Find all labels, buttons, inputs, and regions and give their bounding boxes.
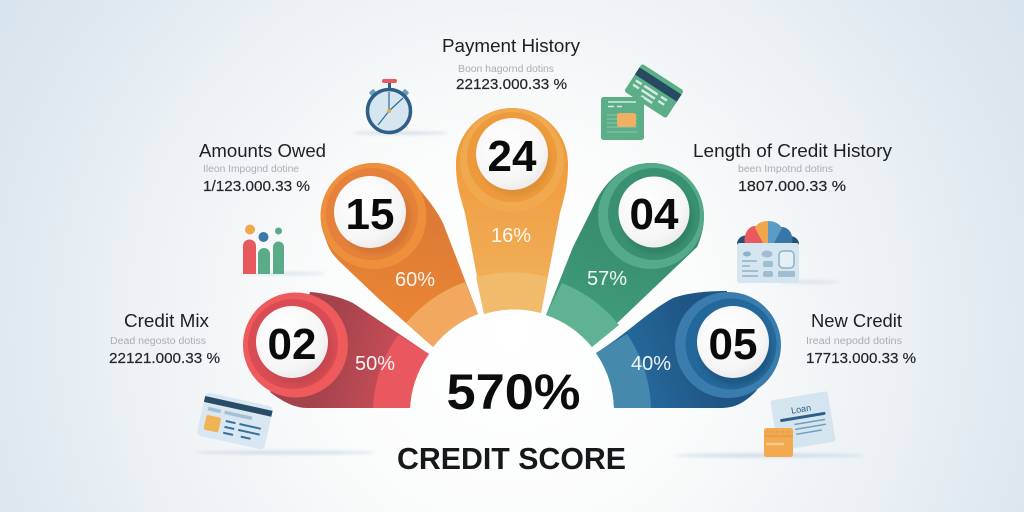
icon: fan chart card	[737, 221, 840, 284]
center score: 570%: 570%	[446, 364, 580, 420]
label: credit mix: Credit Mix	[124, 311, 209, 331]
panel: credit mix petal	[243, 292, 429, 408]
ring: payment history	[460, 108, 564, 212]
label: payment history: Boon hagornd dotins	[458, 64, 554, 75]
label: amounts owed: Ileon Impognd dotine	[203, 164, 299, 175]
number: 05: 05	[709, 320, 757, 369]
icon: stopwatch	[352, 79, 448, 134]
petal band: credit mix	[373, 335, 429, 408]
badge: 04	[618, 176, 690, 248]
panel: payment history petal	[456, 108, 568, 314]
label: amounts owed: Amounts Owed	[199, 141, 326, 161]
number: 04: 04	[630, 190, 679, 239]
badge: 15	[334, 176, 406, 248]
badge: 24	[476, 118, 548, 190]
label: length of credit history: Length of Credit History	[693, 141, 892, 161]
petal band: new credit	[596, 334, 651, 408]
label: new credit	[806, 311, 916, 367]
icon: loan document	[675, 391, 865, 458]
ring: new credit	[675, 292, 781, 398]
icon: green credit card and receipt	[601, 64, 684, 140]
label: payment history: 22123.000.33 %	[456, 76, 567, 93]
label: payment history: Payment History	[442, 36, 580, 56]
label: length of credit history	[693, 141, 892, 195]
percent: 50%: 50%	[355, 353, 395, 375]
label: payment history	[442, 36, 580, 93]
label: new credit: Iread nepodd dotins	[806, 336, 902, 347]
percent: 40%: 40%	[631, 353, 671, 375]
badge: 02	[256, 306, 328, 378]
icon: bar chart people	[243, 224, 325, 275]
petal band: length of credit history	[546, 283, 619, 347]
label: length of credit history: been Impotnd dotins	[738, 164, 833, 175]
label: credit mix: 22121.000.33 %	[109, 350, 220, 367]
panel: amounts owed petal	[320, 163, 478, 347]
number: 24: 24	[488, 132, 537, 181]
label: new credit: New Credit	[811, 311, 902, 331]
panel: new credit petal	[596, 291, 781, 408]
label: amounts owed: 1/123.000.33 %	[203, 178, 310, 195]
icon: blue bank card	[195, 392, 375, 454]
label: new credit: 17713.000.33 %	[806, 350, 916, 367]
percent: 57%: 57%	[587, 268, 627, 290]
label: amounts owed	[199, 141, 326, 195]
label: credit mix	[109, 311, 220, 367]
ring: credit mix	[243, 292, 348, 398]
number: 15: 15	[346, 190, 394, 239]
panel: length of credit history petal	[546, 163, 704, 347]
label: length of credit history: 1807.000.33 %	[738, 178, 846, 195]
percent: 16%: 16%	[491, 225, 531, 247]
percent: 60%: 60%	[395, 269, 435, 291]
petal band: payment history	[476, 272, 548, 314]
petal band: amounts owed	[406, 282, 478, 347]
icon: loan document: Loan	[790, 403, 812, 416]
label: credit mix: Dead negosto dotiss	[110, 336, 206, 347]
badge: 05	[697, 306, 769, 378]
ring: amounts owed	[320, 163, 426, 269]
ring: length of credit history	[598, 163, 704, 269]
title: credit score: CREDIT SCORE	[397, 441, 626, 476]
number: 02: 02	[268, 320, 316, 369]
